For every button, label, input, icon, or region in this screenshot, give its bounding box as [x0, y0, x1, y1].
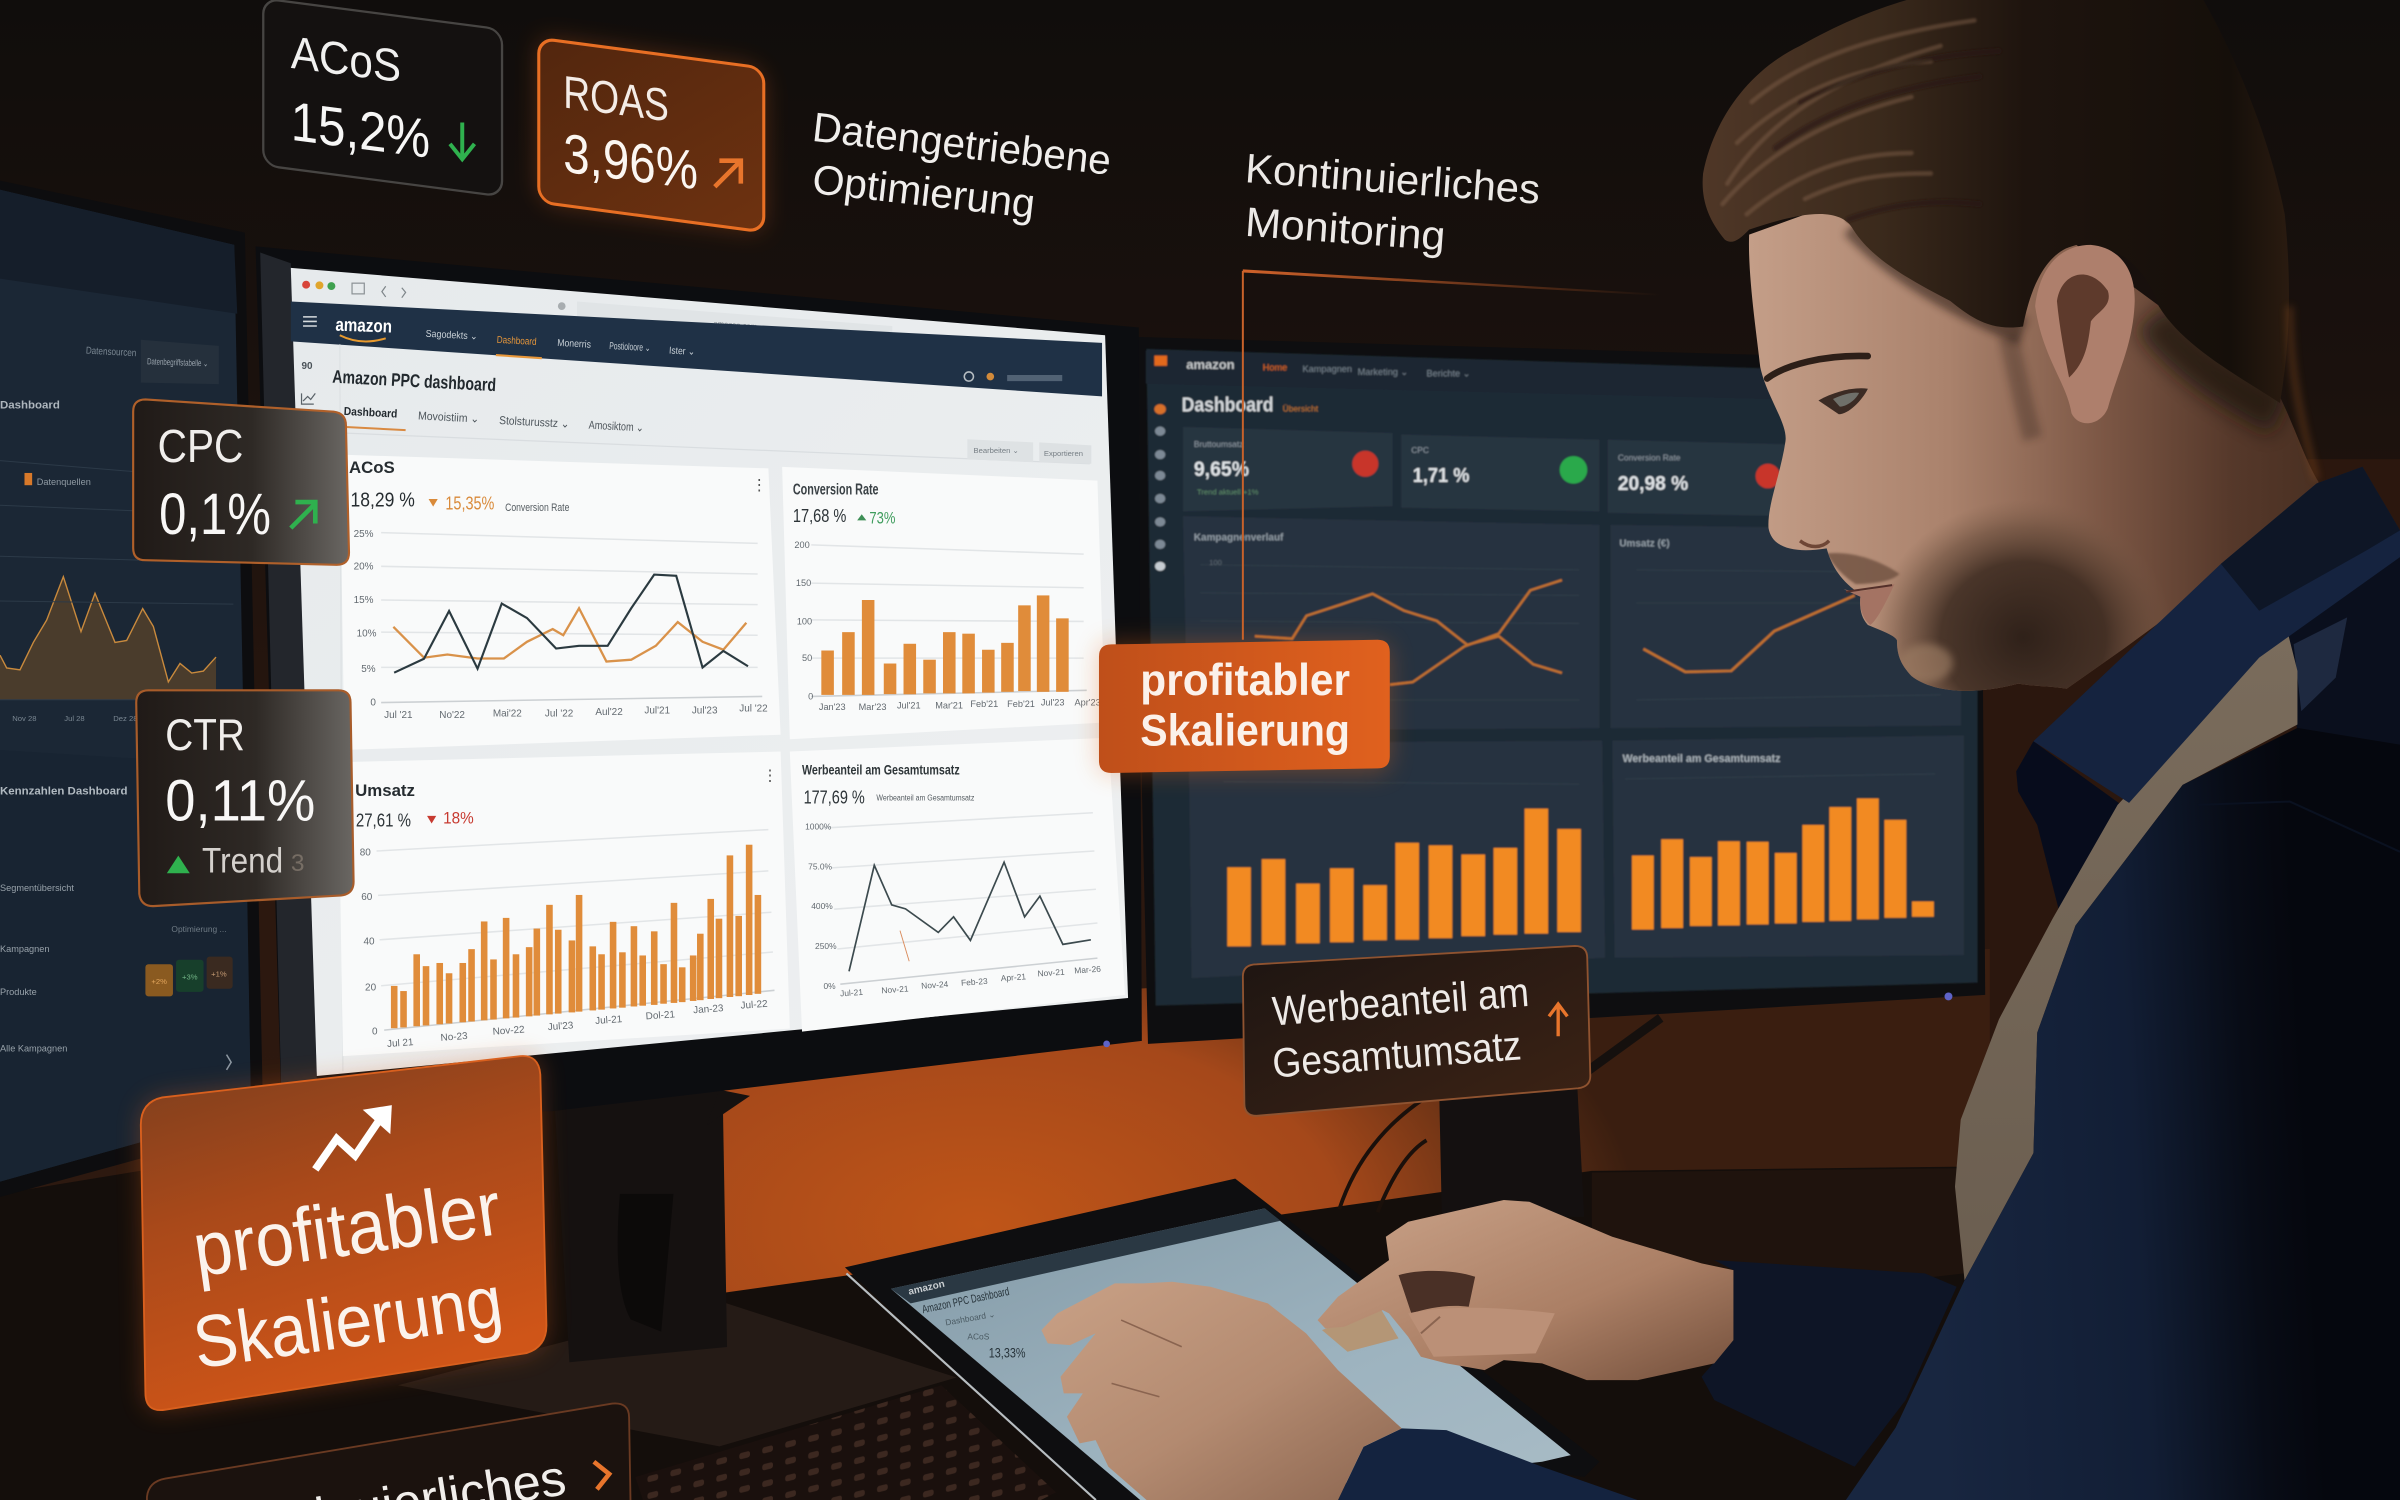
chart card: Werbeanteil: Jul-21 — [840, 987, 864, 998]
chart card: Umsatz: Jul-21 — [595, 1014, 623, 1027]
shirt sleeve and shoulder — [1846, 728, 2400, 1500]
chart card: Umsatz: Jul 21 — [387, 1037, 414, 1050]
chart card: Werbeanteil: Nov-21 — [881, 983, 909, 995]
chart card: Umsatz: 80 — [360, 848, 371, 859]
dark dashboard screen: Berichte ⌄ — [1427, 369, 1470, 379]
chart card: Umsatz: Dol-21 — [645, 1009, 676, 1022]
navigation bar: amazon — [335, 314, 392, 337]
chart card: Werbeanteil: 250% — [815, 941, 837, 951]
dark dashboard screen: 100 — [1209, 558, 1222, 567]
power led — [1103, 1041, 1110, 1047]
desk — [0, 1102, 1990, 1500]
callout: ACoS: ACoS — [291, 26, 401, 92]
left dark monitor — [0, 181, 263, 1197]
callout: CTR: CTR — [165, 711, 245, 760]
keyboard — [635, 1385, 1056, 1500]
chart card: Conversion Rate: 17,68 % — [793, 505, 846, 526]
left dark monitor: Alle Kampagnen — [0, 1044, 67, 1054]
left dark monitor: Produkte — [0, 987, 37, 997]
chart card: ACoS: 5% — [361, 664, 376, 675]
left dark monitor: Dashboard — [0, 400, 60, 412]
callout: profitabler Skalierung (centre): Skalierung — [1140, 706, 1350, 755]
chart card: Umsatz: 20 — [365, 982, 377, 993]
callout: CTR: Trend — [202, 841, 283, 880]
chart card: ACoS: 18,29 % — [351, 490, 415, 512]
tabs: Movoistiim ⌄ — [418, 410, 479, 426]
tabs: Stolsturusstz ⌄ — [499, 415, 570, 431]
chart card: Werbeanteil — [790, 738, 1125, 1032]
connector line — [1243, 269, 1661, 640]
dark dashboard screen: Bruttoumsatz — [1194, 439, 1243, 449]
tabs — [343, 406, 1091, 464]
monitor bezel — [1131, 337, 1985, 1044]
callout: CPC — [133, 399, 349, 565]
navigation bar: Monerris — [557, 338, 591, 351]
chart card: ACoS: 15,35% — [445, 493, 494, 514]
chart card: Conversion Rate: Conversion Rate — [793, 481, 879, 498]
browser chrome: amazon.com — [713, 319, 757, 331]
upper hand — [1318, 1200, 1733, 1380]
chart card: Conversion Rate: 0 — [808, 691, 813, 701]
area chart — [0, 461, 233, 700]
tablet: amazon — [907, 1279, 946, 1298]
callout: profitabler Skalierung (large) — [141, 1056, 546, 1410]
tabs: Amosiktom ⌄ — [588, 420, 644, 434]
icon: green triangle — [167, 856, 190, 873]
heading: Kontinuierliches Monitoring: Monitoring — [1244, 199, 1447, 259]
sidebar — [302, 344, 343, 1071]
callout: Kontinuierliches (cropped at bottom) — [147, 1403, 631, 1500]
icon: orange up arrow — [715, 161, 741, 187]
chart card: ACoS: 15% — [354, 595, 374, 606]
dark dashboard screen: 20,98 % — [1618, 473, 1689, 495]
chart card: ACoS: Jul '22 — [545, 708, 574, 719]
dark dashboard screen: Trend aktuell +1% — [1197, 487, 1259, 496]
heading: Datengetriebene Optimierung — [810, 104, 1113, 227]
tablet: 13,33% — [989, 1346, 1026, 1361]
hair — [1703, 0, 2289, 403]
status pills: +1% — [211, 970, 227, 979]
callout: CTR: 3 — [291, 850, 304, 877]
chart card: ACoS: 0 — [370, 698, 376, 709]
chart card: Werbeanteil: Werbeanteil am Gesamtumsatz — [876, 793, 974, 803]
chart card: ACoS: Jul'21 — [644, 705, 671, 716]
dark dashboard screen — [1146, 349, 1978, 1006]
main monitor stand and base — [398, 1079, 957, 1446]
eye — [1818, 388, 1868, 414]
chart card: Umsatz — [338, 752, 790, 1056]
collar — [2033, 467, 2400, 803]
bezel — [256, 246, 1142, 1114]
heading: Datengetriebene Optimierung: Datengetriebene — [810, 104, 1113, 184]
chart card: ACoS: Jul '22 — [739, 704, 768, 715]
dark dashboard screen: Kampagnen — [1303, 364, 1352, 374]
callout: ROAS — [539, 38, 764, 232]
tablet: ACoS — [967, 1331, 990, 1341]
chart card: Umsatz: 40 — [364, 936, 375, 947]
callout: profitabler Skalierung (large): profitabler — [188, 1166, 506, 1293]
brow — [1767, 356, 1868, 379]
chart card: Werbeanteil: Werbeanteil am Gesamtumsatz — [802, 762, 960, 777]
navigation bar — [291, 302, 1102, 396]
dark dashboard screen: amazon — [1186, 357, 1235, 372]
chart card: Conversion Rate: Jan'23 — [819, 702, 846, 712]
dark dashboard screen: Home — [1263, 362, 1287, 372]
right monitor stand — [1339, 1018, 1661, 1217]
icon: rising trend arrow — [315, 1105, 392, 1169]
callout: Werbeanteil am Gesamtumsatz: Werbeanteil am — [1271, 969, 1531, 1034]
status pills: +2% — [151, 977, 167, 986]
vest — [1955, 625, 2297, 1280]
callout: Werbeanteil am Gesamtumsatz: Gesamtumsatz — [1271, 1022, 1523, 1087]
shirt body and vest — [1846, 544, 2400, 1500]
chart card: Werbeanteil: Apr-21 — [1000, 971, 1027, 983]
dark dashboard screen: Conversion Rate — [1618, 453, 1681, 463]
hairline fade — [1853, 224, 2023, 332]
page title: Amazon PPC dashboard — [332, 366, 497, 395]
chart card: Umsatz: Jul-22 — [740, 999, 768, 1012]
tablet — [845, 1179, 1599, 1500]
dark dashboard screen: Werbeanteil am Gesamtumsatz — [1622, 753, 1780, 765]
left dark monitor: Kampagnen — [0, 944, 49, 954]
dark dashboard screen: Marketing ⌄ — [1358, 367, 1408, 377]
navigation bar: Dashboard — [497, 335, 537, 348]
dark dashboard screen: 1,71 % — [1413, 465, 1470, 487]
left dark monitor: Datenbegriffstabelle ⌄ — [147, 356, 208, 368]
power led — [1944, 992, 1952, 1000]
man — [1041, 0, 2400, 1500]
chart card: Werbeanteil: Mar-26 — [1074, 964, 1102, 975]
left dark monitor: Segmentübersicht — [0, 883, 74, 893]
navigation bar: Sagodekts ⌄ — [425, 329, 478, 342]
left dark monitor: Jul 28 — [64, 714, 85, 723]
chart card: Werbeanteil: 177,69 % — [804, 787, 865, 808]
orange rim light — [2290, 306, 2316, 480]
chart card: Conversion Rate: Apr'23 — [1074, 698, 1101, 708]
heading: Kontinuierliches Monitoring — [1244, 145, 1542, 259]
tabs: Exportieren — [1044, 449, 1083, 458]
dark dashboard screen: Übersicht — [1283, 404, 1319, 414]
tabs: Bearbeiten ⌄ — [973, 446, 1019, 455]
callout: Werbeanteil am Gesamtumsatz — [1243, 946, 1590, 1116]
chart card: ACoS: ⋮ — [752, 477, 767, 494]
right dark monitor — [1131, 337, 1985, 1044]
chart card: Umsatz: Nov-22 — [492, 1024, 525, 1038]
chart card: Conversion Rate: Jul'23 — [1041, 698, 1065, 708]
tabs: Dashboard — [343, 406, 398, 421]
status pills: +3% — [182, 973, 198, 982]
chart card: Werbeanteil: Nov-21 — [1037, 967, 1065, 979]
dark beard along the jaw — [1881, 512, 2144, 691]
left dark monitor: Datenquellen — [37, 477, 91, 487]
nostril and lips — [1800, 541, 1829, 547]
chart card: Conversion Rate: 100 — [797, 616, 812, 626]
callout: CPC: 0,1% — [159, 482, 271, 547]
left screen — [0, 190, 251, 1182]
chart card: Umsatz: Umsatz — [355, 781, 415, 800]
chart card: Werbeanteil: Nov-24 — [921, 979, 949, 991]
chart card: ACoS: Jul '21 — [384, 710, 413, 721]
dark dashboard screen: 9,65% — [1194, 457, 1249, 481]
callout: CTR — [136, 690, 354, 906]
inner shirt — [2016, 741, 2121, 915]
chart card: Umsatz: 60 — [361, 892, 373, 903]
icon: green arrow — [291, 502, 315, 528]
callout: profitabler Skalierung (centre) — [1099, 640, 1390, 773]
chart card: Umsatz: 18% — [443, 808, 474, 827]
icon: orange up arrow — [1549, 1004, 1567, 1036]
facial shading, clipped to the face — [1827, 224, 2280, 775]
tablet: Amazon PPC Dashboard — [921, 1286, 1010, 1316]
chart card: ACoS: 10% — [357, 629, 377, 640]
heading: Datengetriebene Optimierung: Optimierung — [810, 156, 1037, 227]
callout: profitabler Skalierung (centre): profitabler — [1140, 656, 1350, 705]
chart card: Conversion Rate: Jul'21 — [897, 701, 921, 711]
chart card: Conversion Rate — [782, 467, 1105, 739]
callout: ACoS — [263, 0, 502, 196]
chart card: Umsatz: ⋮ — [762, 768, 778, 785]
dark dashboard screen: Kampagnenverlauf — [1194, 532, 1284, 543]
chart card: ACoS: Conversion Rate — [505, 502, 569, 514]
chart card: Conversion Rate: Feb'21 — [1007, 699, 1035, 709]
left dark monitor: Nov 28 — [12, 714, 36, 723]
tablet: Dashboard ⌄ — [945, 1309, 996, 1327]
dark dashboard screen: Umsatz (€) — [1619, 538, 1670, 549]
chart card: Umsatz: Jul'23 — [547, 1020, 574, 1033]
left dark monitor: Datensourcen — [86, 346, 137, 359]
callout: ACoS: 15,2% — [291, 90, 430, 170]
chart card: Conversion Rate: 150 — [796, 578, 811, 588]
chart card: Conversion Rate: Mar'23 — [859, 702, 886, 712]
callout: CPC: CPC — [158, 420, 243, 472]
chart card: Conversion Rate: 50 — [802, 653, 812, 663]
hair strands — [1722, 20, 1999, 219]
status pills — [145, 957, 233, 996]
sidebar: 90 — [302, 361, 313, 372]
ear — [2035, 245, 2135, 423]
dark dashboard screen: CPC — [1411, 445, 1429, 455]
chart card: Werbeanteil: Feb-23 — [961, 976, 988, 988]
chart card: Werbeanteil: 1000% — [805, 822, 832, 832]
left dark monitor: Kennzahlen Dashboard — [0, 785, 127, 797]
neck and face — [1702, 0, 2321, 691]
dark dashboard screen: Dashboard — [1182, 395, 1273, 417]
navigation bar: Postioloore ⌄ — [609, 341, 651, 354]
chart card: ACoS: 25% — [354, 529, 374, 540]
chart card: Umsatz: No-23 — [440, 1031, 468, 1044]
chart card: ACoS: No'22 — [439, 710, 465, 721]
chart card: Werbeanteil: 400% — [811, 901, 833, 911]
light dashboard screen — [291, 268, 1128, 1076]
bezel — [0, 181, 263, 1197]
chart card: ACoS: ACoS — [349, 458, 395, 477]
chart card: Conversion Rate: 200 — [794, 540, 810, 550]
chart card: Conversion Rate: Mar'21 — [935, 701, 963, 711]
chart card: Werbeanteil: 75.0% — [808, 861, 833, 871]
icon: green down arrow — [450, 122, 474, 159]
chart card: ACoS — [340, 455, 781, 750]
heading: Kontinuierliches Monitoring: Kontinuierliches — [1244, 145, 1542, 213]
dark back panel behind collar — [2282, 544, 2400, 758]
left dark monitor: Optimierung ... — [171, 924, 227, 934]
left dark monitor: Dez 28 — [113, 714, 137, 723]
navigation bar: Ister ⌄ — [669, 346, 695, 358]
moustache — [1827, 553, 1899, 584]
lower hand — [1041, 1282, 1402, 1500]
main monitor — [256, 246, 1142, 1114]
icon: orange chevron — [594, 1462, 609, 1489]
callout: ROAS: 3,96% — [563, 122, 698, 201]
chart card: ACoS: Mai'22 — [493, 708, 522, 719]
chart card: ACoS: Aul'22 — [595, 707, 623, 718]
chart card: ACoS: Jul'23 — [692, 705, 718, 716]
callout: CTR: 0,11% — [165, 768, 315, 833]
chart card: Umsatz: 0 — [372, 1027, 378, 1038]
chart card: Werbeanteil: 0% — [823, 981, 836, 991]
callout: ROAS: ROAS — [563, 66, 669, 131]
chart card: ACoS: 20% — [354, 561, 374, 572]
callout: profitabler Skalierung (large): Skalierung — [188, 1259, 507, 1384]
chart card: Conversion Rate: 73% — [869, 508, 895, 527]
sleeve near tablet — [1338, 1260, 1957, 1500]
chin stubble — [1899, 644, 1953, 683]
browser chrome — [302, 281, 892, 341]
chart card: Umsatz: Jan-23 — [693, 1003, 724, 1016]
chart card: Conversion Rate: Feb'21 — [970, 699, 998, 709]
chart card: Umsatz: 27,61 % — [356, 810, 411, 831]
